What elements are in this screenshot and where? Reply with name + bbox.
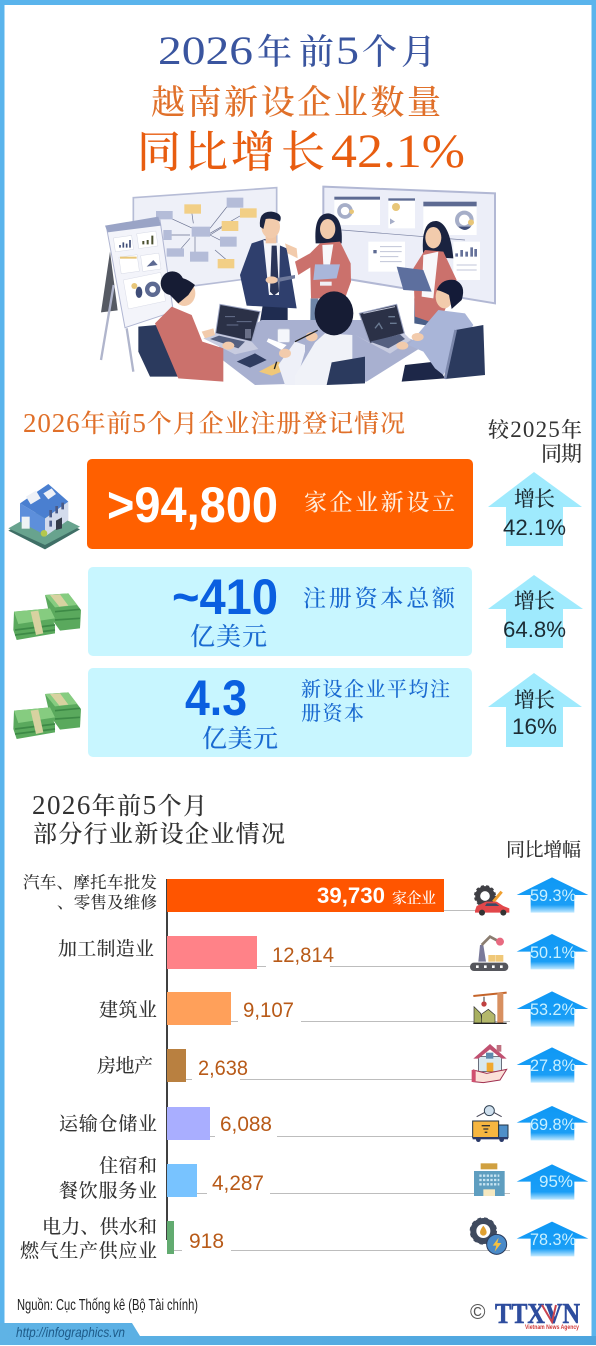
caption average capital — [301, 678, 450, 725]
comparison caption: 同期 — [541, 442, 582, 466]
icon: hotel — [474, 1163, 505, 1196]
title block — [137, 28, 465, 178]
arrow: growth 64.8%: 64.8% — [503, 617, 566, 642]
icons column top — [470, 877, 588, 1083]
arrow: growth 42.1% — [488, 472, 582, 546]
panel: registered capital — [88, 567, 472, 656]
title line 2: 越南新设企业数量 — [151, 84, 441, 122]
arrow: growth 16% — [488, 673, 582, 747]
section heading: by industry: 部分行业新设企业情况 — [33, 821, 285, 848]
title line 3: 同比增长 — [137, 128, 325, 177]
bar: wholesale and retail: 家企业 — [392, 890, 436, 907]
arrow 50.1% — [517, 934, 588, 969]
seated woman centre — [278, 291, 365, 385]
growth percentages: 69.8% — [530, 1115, 576, 1134]
bar: construction — [167, 992, 294, 1025]
caption new enterprises: 家企业新设立 — [304, 490, 455, 515]
arrow 27.8% — [517, 1047, 588, 1083]
arrow: growth 64.8%: 增长 — [514, 589, 555, 613]
comparison caption: 较2025年 — [488, 417, 582, 442]
growth percentages: 59.3% — [530, 886, 576, 905]
desk items — [237, 329, 290, 376]
title line 3: 42.1% — [331, 125, 465, 178]
label: wholesale and retail: 、零售及维修 — [57, 892, 158, 912]
label: hospitality — [59, 1155, 157, 1202]
seated person right — [396, 280, 485, 382]
section heading: by industry: 2026年前5个月 — [32, 790, 207, 820]
label: wholesale and retail — [23, 873, 158, 912]
bar: wholesale and retail: 39,730 — [317, 883, 385, 908]
bar: hospitality — [167, 1164, 264, 1197]
arrow 59.3% — [517, 877, 588, 913]
icon: money stack — [13, 692, 81, 739]
bar: real estate — [167, 1049, 248, 1082]
column caption: 同比增幅 — [506, 839, 581, 861]
label: real estate: 房地产 — [97, 1055, 153, 1077]
title line 3 — [137, 125, 465, 178]
value 410: ~410 — [172, 569, 278, 625]
label: utilities — [20, 1216, 157, 1262]
unit: 亿美元 — [202, 725, 278, 753]
copyright mark: © — [470, 1301, 486, 1324]
value 94,800: >94,800 — [107, 477, 278, 533]
bar: hospitality: 4,287 — [212, 1172, 264, 1195]
growth percentages — [530, 886, 576, 1249]
bar: manufacturing: 12,814 — [272, 944, 334, 967]
arrow 69.8% — [517, 1106, 588, 1140]
bar chart: industries — [20, 873, 510, 1262]
growth percentages: 95% — [539, 1172, 573, 1191]
standing woman on the right — [397, 221, 457, 327]
bar: utilities — [167, 1221, 224, 1254]
panel: new enterprises — [87, 459, 473, 549]
bar: logistics: 6,088 — [220, 1113, 272, 1136]
laptop left — [203, 304, 260, 354]
icon: energy gears — [471, 1218, 507, 1254]
icon: car and wrench — [475, 886, 509, 916]
laptop right — [354, 304, 411, 354]
logo: TTXVN: Vietnam News Agency — [525, 1325, 580, 1331]
title line 1 — [158, 28, 436, 73]
bar: construction: 9,107 — [243, 999, 294, 1022]
arrow 78.3% — [517, 1222, 588, 1256]
icon: construction crane — [473, 993, 507, 1023]
unit: 亿美元 — [190, 623, 267, 651]
label: construction: 建筑业 — [99, 999, 157, 1021]
icon: money stack — [13, 593, 81, 640]
mind map board — [133, 188, 277, 286]
source note: Nguồn: Cục Thống kê (Bộ Tài chính) — [17, 1297, 198, 1314]
caption average capital: 新设企业平均注 — [301, 678, 450, 701]
title line 1: 个月 — [362, 33, 436, 72]
seated woman left — [138, 271, 234, 382]
arrow 53.2% — [517, 991, 588, 1027]
bar: wholesale and retail — [167, 879, 444, 912]
label: utilities: 电力、供水和 — [42, 1216, 157, 1238]
arrow: growth 64.8% — [488, 575, 583, 648]
title line 1: 5 — [336, 28, 359, 73]
bar: real estate: 2,638 — [198, 1057, 248, 1080]
section heading: registration: 2026年前5个月企业注册登记情况 — [23, 408, 405, 438]
footer tab with website — [0, 1323, 596, 1345]
arrow: growth 16%: 增长 — [514, 688, 555, 712]
label: manufacturing: 加工制造业 — [58, 938, 154, 960]
icon: delivery truck — [473, 1106, 508, 1142]
icons column bottom — [471, 1106, 588, 1256]
panel: average capital — [88, 668, 472, 757]
logo: TTXVN: TTXVN — [495, 1299, 580, 1330]
illustration: business team meeting — [101, 187, 495, 385]
title line 1: 年前 — [257, 33, 334, 72]
growth percentages: 50.1% — [530, 943, 576, 962]
comparison caption — [488, 417, 582, 466]
flip chart — [101, 217, 173, 372]
meeting table — [212, 320, 425, 385]
dashboard board — [323, 187, 495, 303]
bar: manufacturing — [167, 936, 334, 969]
arrow: growth 42.1%: 增长 — [514, 487, 555, 511]
caption total capital: 注册资本总额 — [303, 586, 456, 611]
label: hospitality: 住宿和 — [99, 1155, 157, 1177]
arrow: growth 16%: 16% — [512, 714, 557, 739]
axis — [166, 879, 168, 1240]
label: logistics: 运输仓储业 — [59, 1113, 157, 1135]
caption average capital: 册资本 — [301, 702, 364, 725]
icon: house on hand — [472, 1044, 507, 1083]
label: utilities: 燃气生产供应业 — [20, 1240, 157, 1262]
standing man — [240, 212, 297, 322]
arrow: growth 42.1%: 42.1% — [503, 515, 566, 540]
growth percentages: 78.3% — [530, 1230, 576, 1249]
value 4.3: 4.3 — [185, 670, 247, 726]
arrow 95% — [517, 1164, 588, 1200]
section heading: by industry — [32, 790, 285, 848]
label: hospitality: 餐饮服务业 — [59, 1180, 157, 1202]
growth percentages: 27.8% — [530, 1056, 576, 1075]
title line 1: 2026 — [158, 28, 253, 73]
bar: logistics — [167, 1107, 272, 1140]
bar: utilities: 918 — [189, 1230, 224, 1253]
icon: factory robot — [470, 937, 508, 971]
footer tab with website: http://infographics.vn — [16, 1324, 125, 1340]
standing woman with tablet — [285, 213, 351, 320]
icon: office building — [8, 484, 80, 549]
growth percentages: 53.2% — [530, 1000, 576, 1019]
label: wholesale and retail: 汽车、摩托车批发 — [23, 873, 157, 892]
